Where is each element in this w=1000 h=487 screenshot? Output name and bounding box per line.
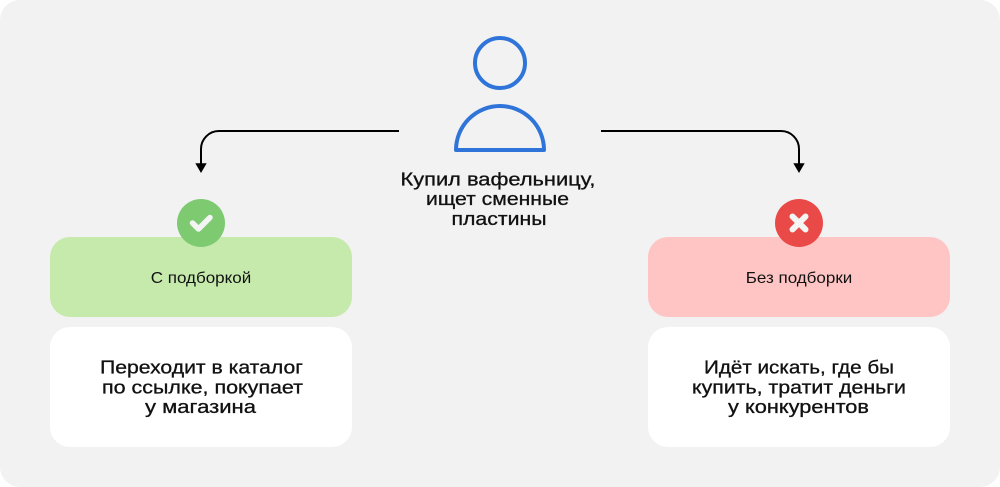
text: customer situation: ищет сменные: [426, 188, 569, 209]
text: customer situation: [400, 168, 596, 229]
text: customer situation: пластины: [452, 208, 546, 229]
header: without selection: Без подборки: [746, 270, 852, 287]
card: with selection outcome: [50, 327, 352, 447]
text: customer situation: Купил вафельницу,: [400, 168, 596, 190]
card: with selection outcome: по ссылке, покупает: [102, 376, 304, 397]
panel: with selection: [50, 199, 352, 447]
icon: user: [456, 38, 544, 150]
header: with selection: С подборкой: [151, 270, 251, 287]
icon: cross mark: [775, 199, 823, 247]
arrow: right branch: [601, 131, 805, 173]
header: without selection: [648, 237, 950, 317]
header: with selection: [50, 237, 352, 317]
arrow: left branch: [195, 131, 399, 173]
card: with selection outcome: у магазина: [145, 396, 257, 417]
card: without selection outcome: [648, 327, 950, 447]
card: without selection outcome: Идёт искать, где бы: [704, 356, 894, 378]
card: with selection outcome: Переходит в каталог: [100, 356, 303, 378]
panel: without selection: [648, 199, 950, 447]
icon: check mark: [177, 199, 225, 247]
card: without selection outcome: купить, тратит деньги: [692, 376, 906, 397]
card: without selection outcome: у конкурентов: [728, 396, 869, 417]
